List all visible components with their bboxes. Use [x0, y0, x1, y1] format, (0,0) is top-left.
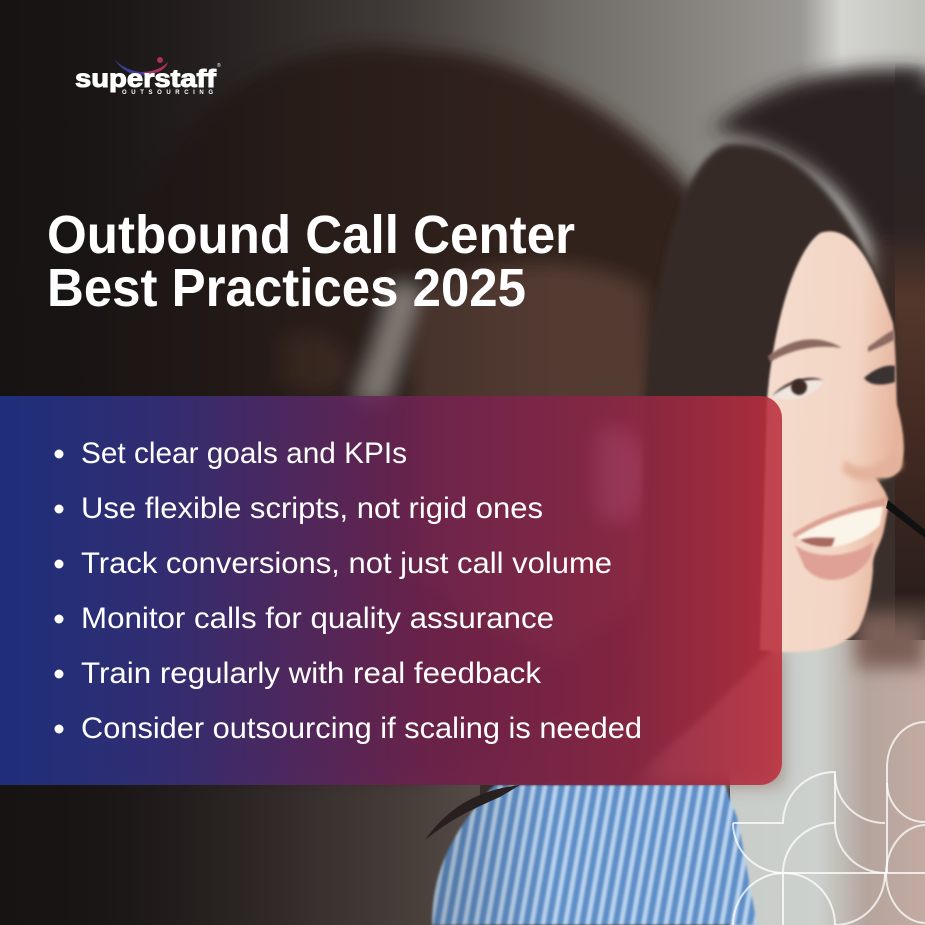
title: [47, 205, 575, 318]
title: Best Practices 2025: [47, 258, 526, 318]
logo: superstaff outsourcing: ®: [217, 62, 221, 69]
agent behind: hair and neck: [0, 46, 925, 785]
bullet: track conversions: Track conversions, not just call volume: [81, 547, 612, 580]
agent face: [760, 231, 904, 652]
hair strands over shirt: [425, 785, 520, 840]
logo: superstaff outsourcing: [75, 57, 221, 96]
title: Outbound Call Center: [47, 205, 575, 265]
agent hair: [620, 144, 899, 785]
agent blue striped shirt: [432, 785, 757, 925]
bullet: train regularly: Train regularly with real feedback: [81, 657, 542, 690]
bullet: consider outsourcing: Consider outsourcing if scaling is needed: [81, 712, 642, 745]
panel: best practices list: [0, 396, 782, 785]
logo: superstaff outsourcing: superstaff: [75, 65, 217, 93]
logo: superstaff outsourcing: OUTSOURCING: [122, 90, 213, 96]
decorative geometric line pattern: [733, 722, 925, 925]
bullet: monitor calls: Monitor calls for quality assurance: [81, 602, 554, 635]
agent facial features: [768, 330, 925, 580]
bullet: flexible scripts: Use flexible scripts, not rigid ones: [81, 492, 543, 525]
bullet: set clear goals: Set clear goals and KPIs: [81, 437, 407, 470]
